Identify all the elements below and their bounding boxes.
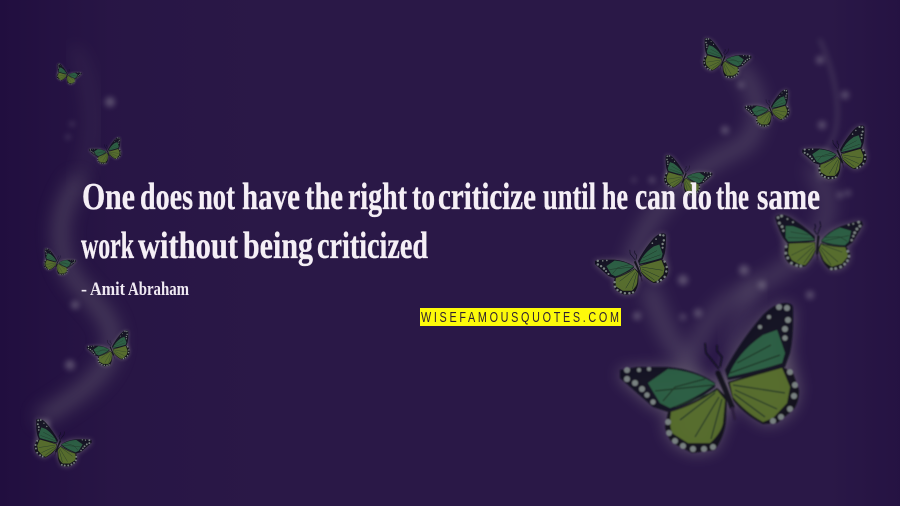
quote text: the (716, 176, 749, 218)
quote text: until (543, 176, 596, 218)
butterfly: top left (57, 64, 82, 85)
butterfly: upper left (89, 137, 121, 164)
quote text: One (82, 176, 135, 218)
sparkles (42, 56, 851, 427)
quote text (81, 176, 820, 267)
attribution: Amit (90, 279, 126, 300)
attribution: Abraham (128, 279, 189, 300)
butterfly: far right (802, 125, 867, 179)
butterfly: mid left (44, 248, 76, 275)
quote text: to (412, 176, 435, 218)
attribution: - (81, 279, 87, 300)
watermark badge: WISEFAMOUSQUOTES.COM (421, 308, 619, 325)
butterfly: large, lower right (620, 303, 799, 453)
quote text: the (305, 176, 343, 218)
butterfly: upper right second (745, 90, 790, 127)
glowing trail: left (43, 50, 113, 417)
quote text: can (635, 176, 676, 218)
quote text: not (198, 176, 235, 218)
quote text: same (757, 176, 820, 218)
quote text: criticize (438, 176, 536, 218)
butterfly: bottom left (34, 419, 92, 467)
quote text: have (242, 176, 300, 218)
quote text: he (602, 176, 628, 218)
butterfly: centre right (595, 233, 668, 295)
quote text: without (138, 225, 238, 267)
quote text: do (682, 176, 712, 218)
quote text: does (140, 176, 193, 218)
butterfly: top right (703, 38, 751, 78)
quote text: being (243, 225, 313, 267)
glowing trail: right (630, 40, 837, 370)
butterfly: lower left (87, 330, 130, 366)
butterfly: above the word can (664, 155, 712, 195)
attribution (81, 279, 189, 300)
quote text: right (348, 176, 407, 218)
quote text: work (81, 225, 135, 267)
butterfly: right of second line (772, 191, 874, 284)
quote text: criticized (317, 225, 428, 267)
